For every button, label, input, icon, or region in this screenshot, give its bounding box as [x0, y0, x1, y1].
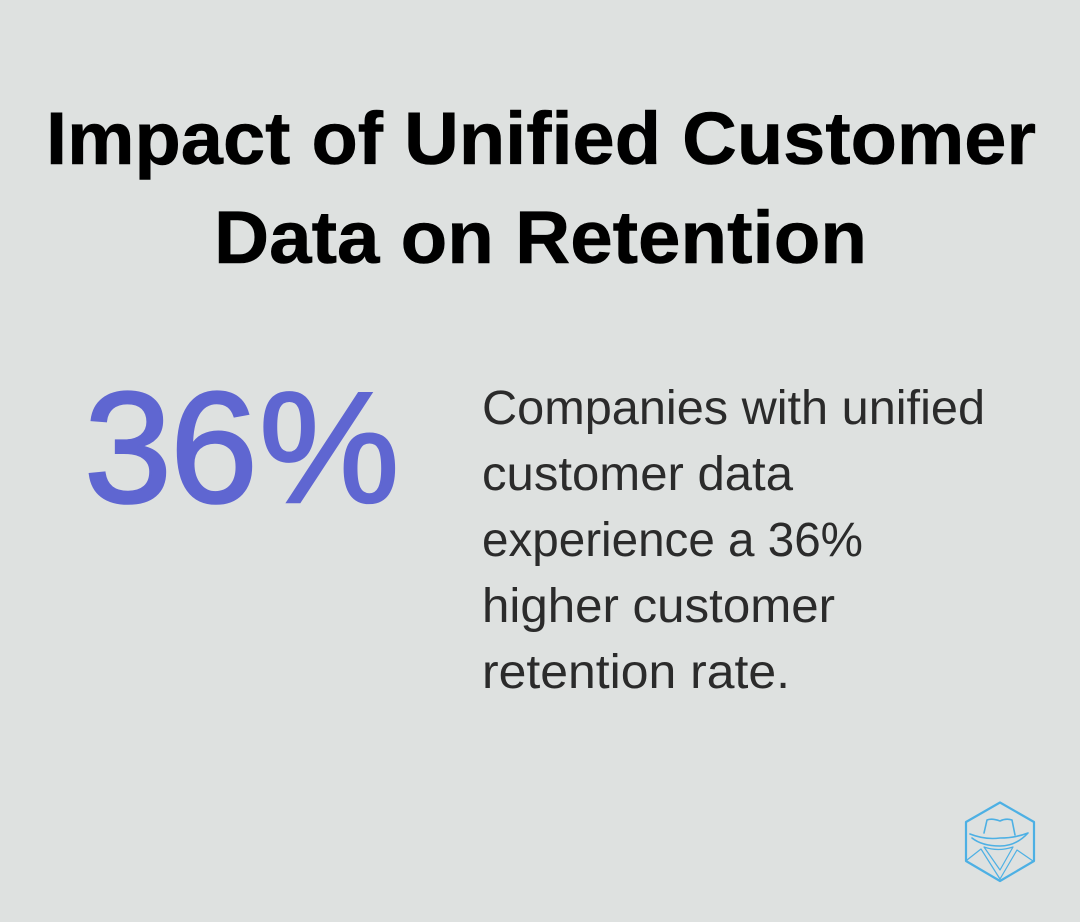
title: Impact of Unified Customer [46, 97, 1036, 180]
description text: higher customer [482, 580, 835, 633]
title: Data on Retention [214, 196, 867, 279]
description text: experience a 36% [482, 514, 863, 567]
description text [482, 382, 985, 699]
description text: Companies with unified [482, 382, 985, 435]
description text: retention rate. [482, 646, 790, 699]
description text: customer data [482, 448, 793, 501]
icon: hexagon logo with hat and collar [966, 802, 1034, 881]
big statistic: 36%: 36% [84, 360, 400, 536]
title [46, 97, 1036, 279]
